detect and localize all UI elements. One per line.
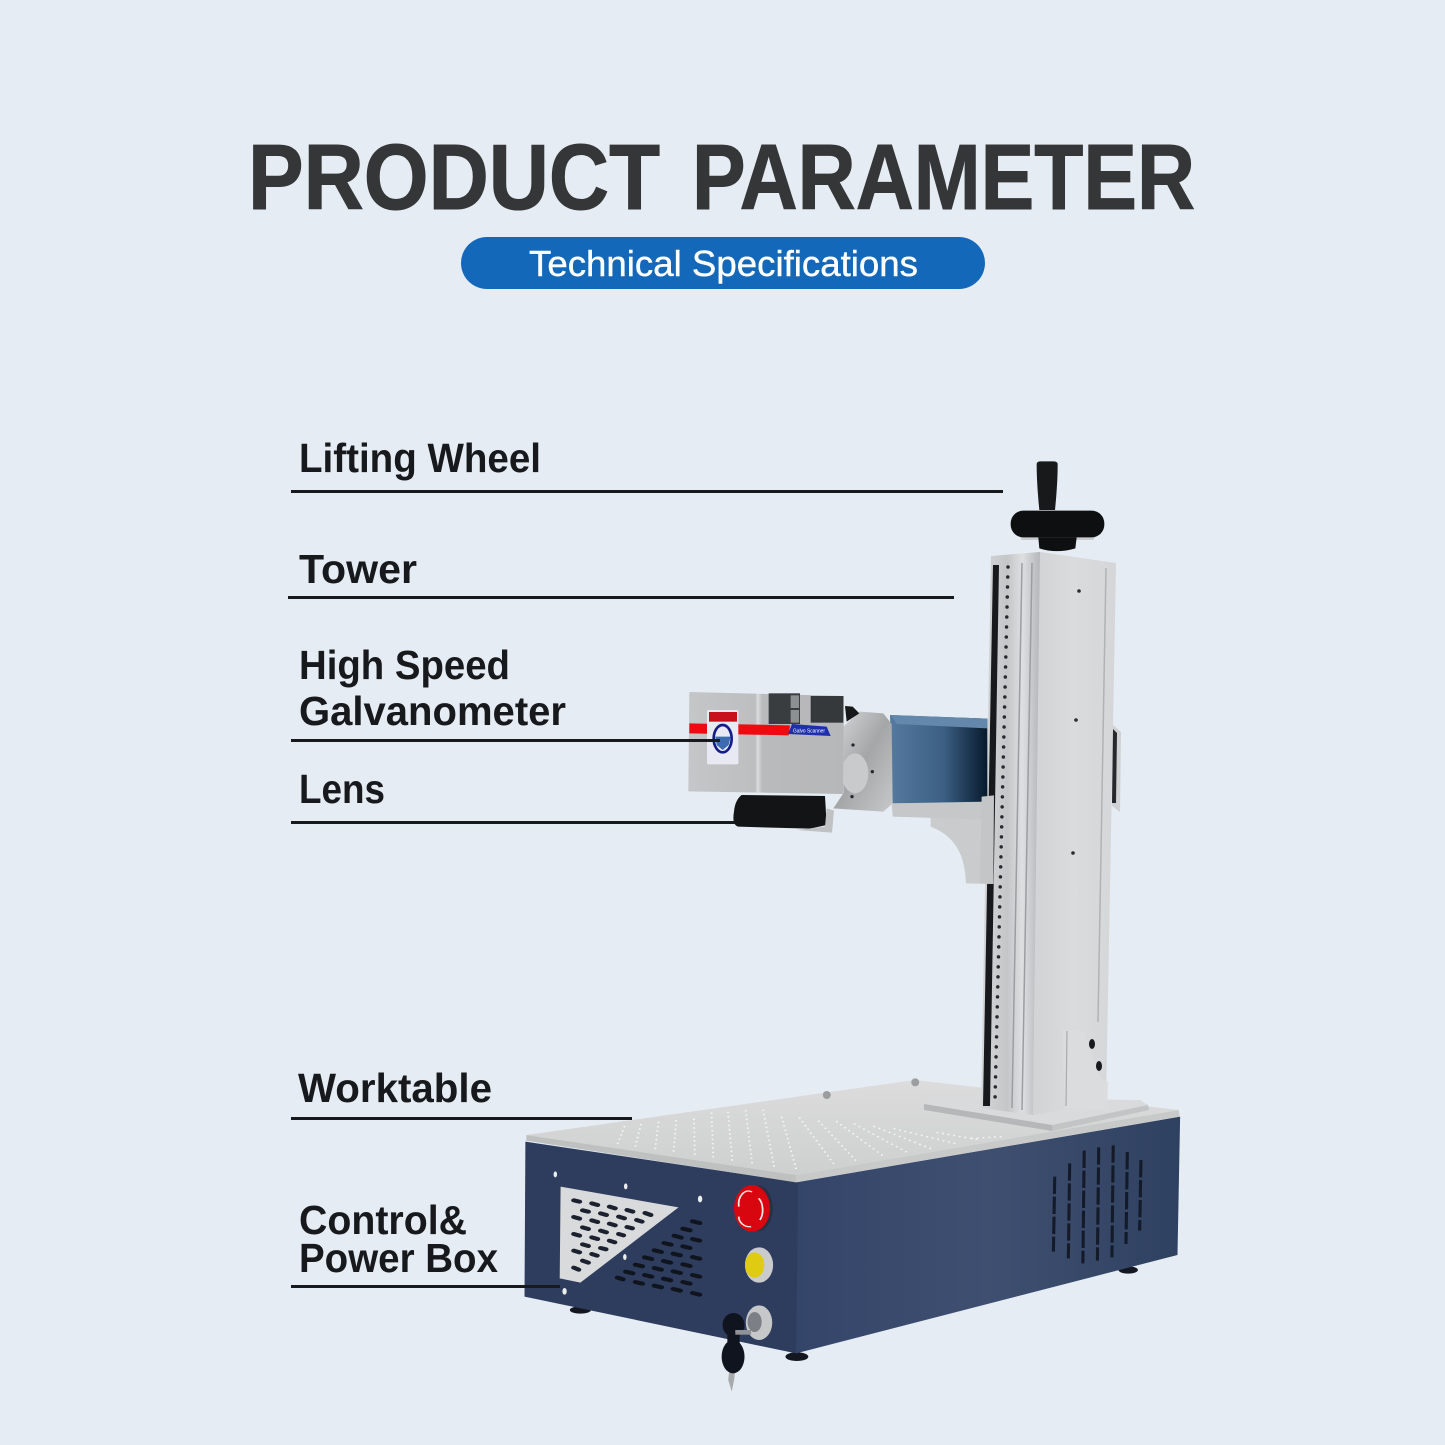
box side face bbox=[796, 1117, 1180, 1353]
label: Lens: Lens bbox=[299, 766, 385, 812]
worktable plate bbox=[526, 1080, 1180, 1182]
title: PRODUCT bbox=[248, 125, 660, 229]
label: High Speed Galvanometer bbox=[291, 642, 720, 742]
label: Tower bbox=[288, 546, 954, 599]
label: High Speed Galvanometer: Galvanometer bbox=[299, 688, 566, 734]
label: Control & Power Box: Power Box bbox=[299, 1235, 498, 1281]
label: Control & Power Box bbox=[291, 1197, 560, 1288]
subtitle pill bbox=[461, 237, 985, 289]
side vents bbox=[1053, 1145, 1141, 1263]
blue badge: Galvo Scanner bbox=[793, 729, 825, 735]
machine: power box bbox=[525, 1078, 1180, 1392]
label: Lifting Wheel: Lifting Wheel bbox=[299, 435, 541, 481]
title bbox=[248, 125, 1195, 229]
worktable pins bbox=[823, 1078, 919, 1099]
red band bbox=[689, 723, 790, 735]
machine: tower column bbox=[981, 552, 1121, 1115]
label: Control & Power Box: Control& bbox=[299, 1197, 467, 1243]
emergency stop button bbox=[734, 1185, 773, 1232]
label: Worktable bbox=[291, 1065, 632, 1120]
box front face bbox=[525, 1142, 798, 1353]
back handle strip bbox=[1112, 725, 1121, 812]
screw holes bbox=[554, 1171, 702, 1295]
tower left profile bbox=[981, 552, 1040, 1115]
tower right face bbox=[1033, 552, 1116, 1115]
triangle vent plate bbox=[560, 1187, 679, 1283]
rail slot bbox=[983, 565, 999, 1106]
machine: tower base bbox=[924, 1098, 1149, 1131]
label: Lens bbox=[291, 766, 735, 824]
control panels bbox=[769, 693, 843, 724]
label: Tower: Tower bbox=[299, 546, 417, 592]
warning sticker bbox=[707, 710, 738, 764]
rear bracket bbox=[1062, 1030, 1108, 1110]
blue arm housing bbox=[890, 715, 987, 819]
plate slots bbox=[574, 1200, 651, 1270]
face groove bbox=[1098, 568, 1106, 1022]
machine: lifting wheel bbox=[1011, 461, 1104, 551]
profile grooves bbox=[1012, 563, 1032, 1110]
galvanometer head bbox=[688, 692, 844, 794]
arm clamp bbox=[980, 795, 994, 884]
label: Worktable: Worktable bbox=[298, 1065, 492, 1111]
subtitle pill: Technical Specifications bbox=[529, 243, 918, 284]
feet bbox=[570, 1266, 1138, 1361]
machine: arm and galvanometer bbox=[688, 692, 994, 884]
blue badge bbox=[788, 724, 831, 736]
title: PARAMETER bbox=[692, 125, 1195, 229]
label: High Speed Galvanometer: High Speed bbox=[299, 642, 510, 688]
worktable holes bbox=[618, 1108, 1001, 1168]
arm support bracket bbox=[931, 817, 993, 884]
rail holes bbox=[995, 567, 1008, 1100]
front vent slots bbox=[617, 1221, 700, 1295]
flange bbox=[833, 712, 893, 812]
key switch with key bbox=[722, 1305, 772, 1392]
yellow indicator button bbox=[745, 1247, 773, 1283]
label: Lifting Wheel bbox=[291, 435, 1003, 493]
face screws bbox=[1071, 589, 1081, 855]
lens bbox=[733, 795, 834, 833]
